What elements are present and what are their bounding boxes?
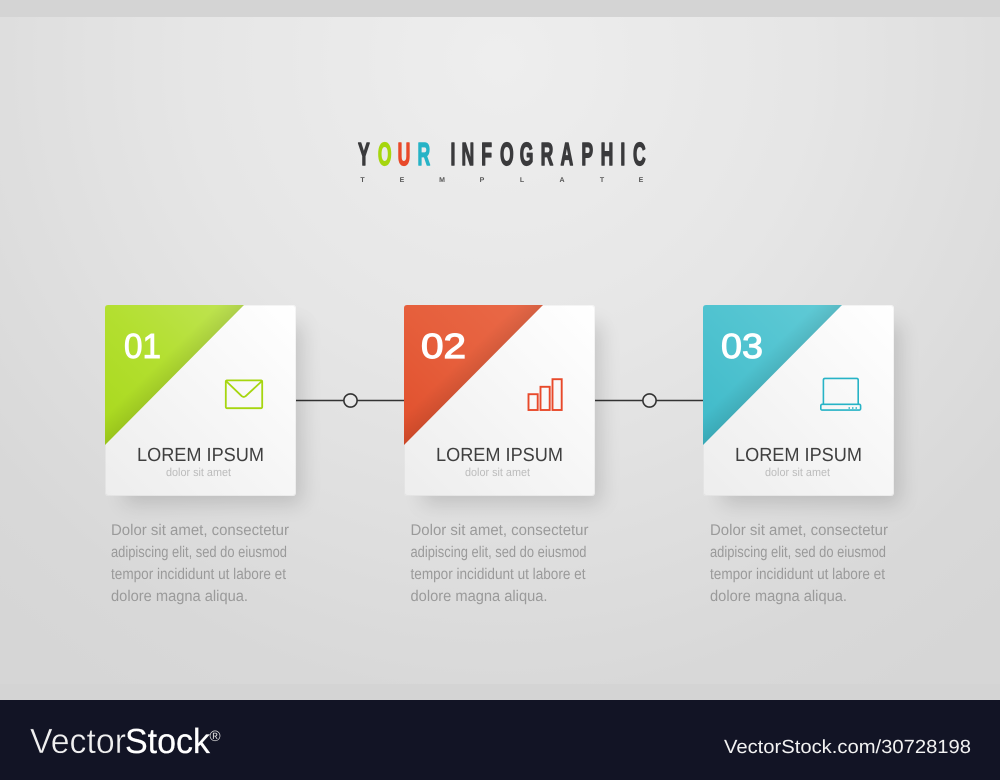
- number 02: 02: [421, 327, 466, 366]
- card heading: LOREM IPSUM: [735, 445, 862, 466]
- card body: [404, 305, 595, 496]
- text block: step 02 description: [410, 522, 588, 605]
- text block: step 01 description: adipiscing elit, sed do eiusmod: [111, 544, 287, 561]
- footer logo: Stock: [125, 722, 210, 761]
- number 01: 01: [124, 327, 161, 366]
- card shadow: [124, 324, 302, 504]
- footer logo: ®: [210, 728, 221, 745]
- card shadow: [722, 324, 900, 504]
- text block: step 01 description: tempor incididunt ut labore et: [111, 566, 287, 583]
- connector lines with nodes: [296, 394, 703, 407]
- title line: your infographic: O: [378, 136, 392, 172]
- title line: your infographic: INFOGRAPHIC: [450, 136, 646, 172]
- subtitle: template: TEMPLATE: [360, 177, 644, 184]
- panel: step 02: [404, 305, 601, 504]
- panel: step 01: [105, 305, 302, 504]
- text block: step 02 description: adipiscing elit, sed do eiusmod: [410, 544, 586, 561]
- footer logo: [30, 722, 221, 761]
- title line: your infographic: [358, 136, 646, 172]
- icon: laptop: [821, 378, 861, 410]
- text block: step 02 description: Dolor sit amet, consectetur: [410, 522, 588, 539]
- text block: step 02 description: dolore magna aliqua.: [410, 588, 548, 605]
- number 03: 03: [721, 327, 763, 366]
- title line: your infographic: Y: [358, 136, 370, 172]
- red corner triangle: [404, 305, 543, 445]
- title: [358, 136, 646, 184]
- text block: step 01 description: Dolor sit amet, consectetur: [111, 522, 289, 539]
- footer image id: VectorStock.com/30728198: [724, 737, 971, 758]
- text block: step 03 description: dolore magna aliqua.: [710, 588, 847, 605]
- footer logo: Vector: [30, 722, 126, 761]
- text block: step 03 description: [710, 522, 888, 605]
- text block: step 03 description: tempor incididunt ut labore et: [710, 566, 886, 583]
- card heading: LOREM IPSUM: [137, 445, 264, 466]
- icon: envelope: [226, 380, 262, 408]
- footer bar: [0, 700, 1000, 780]
- text block: step 03 description: adipiscing elit, sed do eiusmod: [710, 544, 886, 561]
- text block: step 02 description: tempor incididunt ut labore et: [410, 566, 586, 583]
- card subheading: dolor sit amet: [765, 467, 831, 479]
- card shadow: [423, 324, 601, 504]
- card subheading: dolor sit amet: [465, 467, 531, 479]
- text block: step 01 description: dolore magna aliqua.: [111, 588, 248, 605]
- teal corner triangle: [703, 305, 842, 445]
- card subheading: dolor sit amet: [166, 467, 232, 479]
- icon: bar chart: [528, 379, 562, 410]
- title line: your infographic: R: [417, 136, 430, 172]
- text block: step 01 description: [111, 522, 289, 605]
- text block: step 03 description: Dolor sit amet, consectetur: [710, 522, 888, 539]
- card body: [105, 305, 296, 496]
- green corner triangle: [105, 305, 244, 445]
- card heading: LOREM IPSUM: [436, 445, 563, 466]
- card body: [703, 305, 894, 496]
- panel: step 03: [703, 305, 900, 504]
- title line: your infographic: U: [398, 136, 410, 172]
